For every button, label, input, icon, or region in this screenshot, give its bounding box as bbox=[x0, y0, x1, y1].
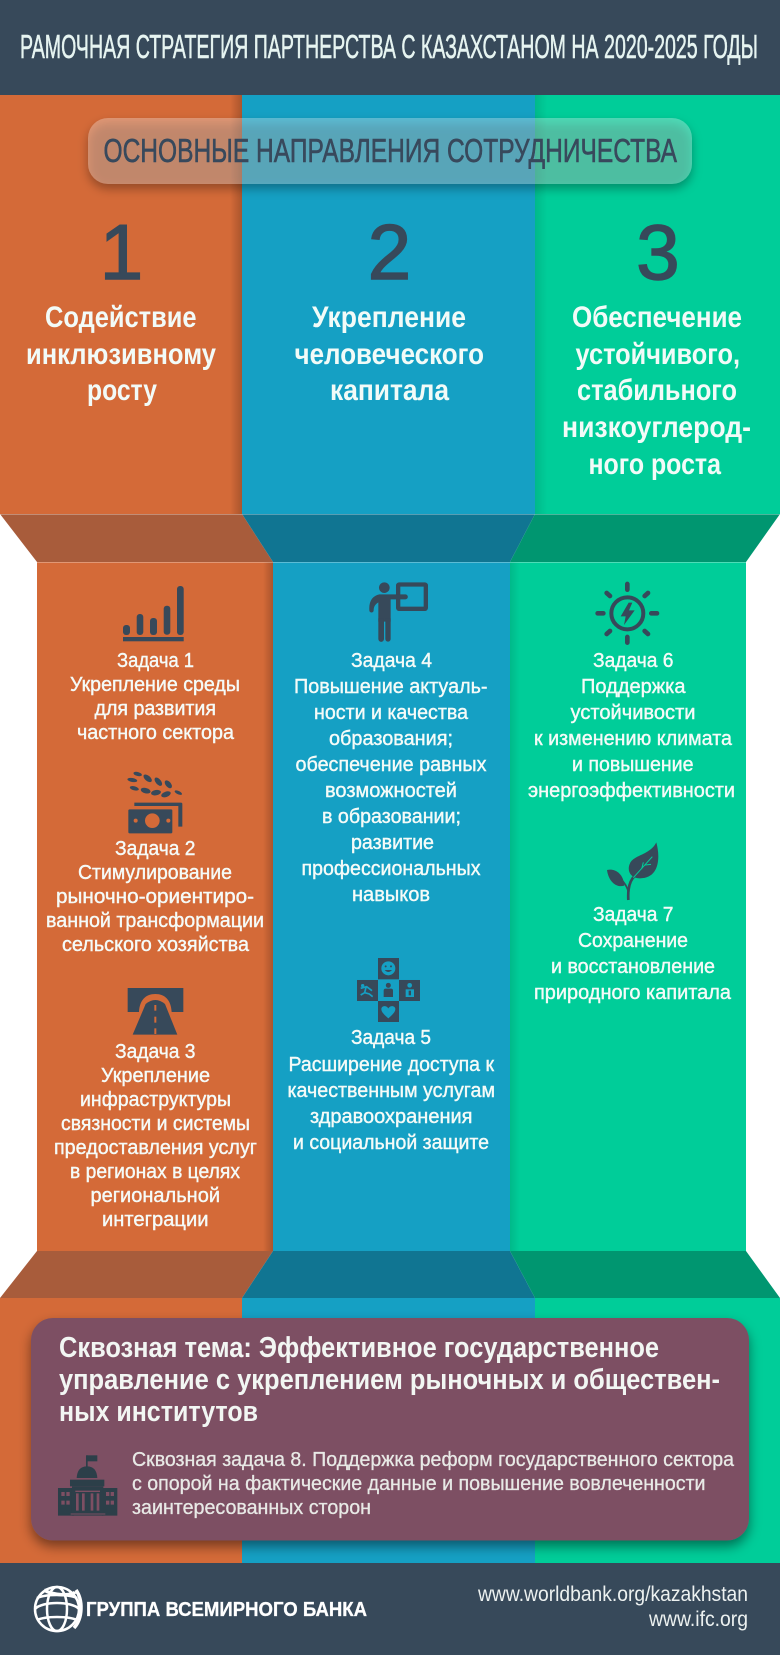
task 3 text: интеграции bbox=[102, 1208, 208, 1231]
World Bank Group wordmark: ГРУППА ВСЕМИРНОГО БАНКА bbox=[86, 1599, 367, 1621]
direction 3 heading bbox=[562, 301, 751, 481]
panel: task columns bbox=[37, 562, 746, 1251]
direction 1 heading: инклюзивному bbox=[26, 338, 217, 371]
direction 2 heading bbox=[294, 301, 484, 407]
task 6 text: Задача 6 bbox=[593, 649, 674, 672]
number 2: 2 bbox=[368, 208, 411, 296]
task 1 text: Укрепление среды bbox=[70, 673, 240, 696]
task 5 text: и социальной защите bbox=[293, 1131, 489, 1154]
panel: top direction columns bbox=[0, 95, 780, 514]
task 7 text: Задача 7 bbox=[593, 903, 674, 926]
task 5 text bbox=[288, 1026, 495, 1154]
task 6 text: и повышение bbox=[572, 753, 694, 776]
icon: bar chart bbox=[123, 586, 184, 641]
cross-cutting task text: с опорой на фактические данные и повышение вовлеченности bbox=[132, 1473, 706, 1495]
task 2 text: Стимулирование bbox=[78, 861, 232, 884]
task 3 text: в регионах в целях bbox=[70, 1160, 241, 1183]
task 7 text: природного капитала bbox=[534, 981, 732, 1004]
icon: wheat and money bbox=[127, 771, 183, 833]
task 2 text: Задача 2 bbox=[115, 837, 196, 860]
task 4 text: развитие bbox=[351, 831, 434, 854]
direction 3 heading: Обеспечение bbox=[572, 301, 742, 334]
connector trapezoids top bbox=[0, 514, 780, 562]
connector trapezoids bottom bbox=[0, 1251, 780, 1298]
task 5 text: Расширение доступа к bbox=[288, 1053, 495, 1076]
task 4 text: ности и качества bbox=[314, 701, 469, 724]
icon: road tunnel bbox=[128, 988, 183, 1035]
task 7 text bbox=[534, 903, 732, 1004]
icon: social services cross bbox=[357, 958, 420, 1022]
cross-cutting heading: ных институтов bbox=[59, 1396, 258, 1428]
direction 2 heading: капитала bbox=[330, 374, 450, 407]
panel: cross-cutting theme bbox=[31, 1318, 749, 1540]
task 4 text: в образовании; bbox=[322, 805, 461, 828]
task 5 text: здравоохранения bbox=[310, 1105, 472, 1128]
cross-cutting heading: Сквозная тема: Эффективное государственное bbox=[59, 1332, 659, 1364]
task 7 text: Сохранение bbox=[578, 929, 688, 952]
cross-cutting heading bbox=[59, 1332, 720, 1428]
task 4 text: профессиональных bbox=[302, 857, 481, 880]
icon: teacher at board bbox=[369, 582, 426, 642]
footer band bbox=[0, 1563, 780, 1655]
task 4 text: Повышение актуаль- bbox=[294, 675, 488, 698]
task 5 text: Задача 5 bbox=[351, 1026, 431, 1049]
task 5 text: качественным услугам bbox=[288, 1079, 495, 1102]
website links: www.worldbank.org/kazakhstan bbox=[477, 1582, 748, 1606]
task 3 text: региональной bbox=[90, 1184, 220, 1207]
task 3 text: связности и системы bbox=[61, 1112, 250, 1135]
task 2 text: ванной трансформации bbox=[46, 909, 264, 932]
direction 2 heading: человеческого bbox=[294, 338, 484, 371]
task 4 text: Задача 4 bbox=[351, 649, 432, 672]
direction 2 heading: Укрепление bbox=[312, 301, 466, 334]
task 1 text: для развития bbox=[94, 697, 216, 720]
task 6 text: устойчивости bbox=[570, 701, 696, 724]
task 4 text bbox=[294, 649, 488, 906]
task 1 text: Задача 1 bbox=[117, 649, 194, 672]
direction 1 heading: Содействие bbox=[45, 301, 196, 334]
task 6 text: к изменению климата bbox=[534, 727, 733, 750]
task 3 text: Задача 3 bbox=[115, 1040, 196, 1063]
heading pill: main directions bbox=[88, 118, 692, 184]
task 1 text bbox=[70, 649, 240, 744]
direction 3 heading: ного роста bbox=[588, 448, 721, 481]
task 2 text: сельского хозяйства bbox=[62, 933, 250, 956]
direction 3 heading: низкоуглерод- bbox=[562, 411, 751, 444]
website links: www.ifc.org bbox=[648, 1607, 748, 1631]
header band bbox=[0, 0, 780, 95]
task 7 text: и восстановление bbox=[551, 955, 715, 978]
task 4 text: навыков bbox=[352, 883, 430, 906]
task 2 text bbox=[46, 837, 264, 956]
icon: sun with energy bolt bbox=[598, 584, 657, 643]
task 6 text: энергоэффективности bbox=[528, 779, 735, 802]
panel: bottom column strip bbox=[0, 1298, 780, 1563]
icon: leaf sprout bbox=[607, 842, 658, 900]
task 4 text: возможностей bbox=[325, 779, 457, 802]
task 6 text: Поддержка bbox=[581, 675, 686, 698]
icon: government building bbox=[58, 1455, 117, 1516]
task 3 text bbox=[54, 1040, 257, 1231]
task 3 text: Укрепление bbox=[101, 1064, 210, 1087]
direction 1 heading: росту bbox=[87, 374, 157, 407]
cross-cutting task text bbox=[132, 1449, 735, 1519]
direction 3 heading: устойчивого, bbox=[576, 338, 740, 371]
task 6 text bbox=[528, 649, 735, 802]
number 1: 1 bbox=[100, 208, 143, 296]
task 1 text: частного сектора bbox=[77, 721, 235, 744]
task 3 text: инфраструктуры bbox=[80, 1088, 231, 1111]
task 4 text: образования; bbox=[329, 727, 453, 750]
number 3: 3 bbox=[636, 208, 680, 296]
website links bbox=[477, 1582, 748, 1631]
direction 1 heading bbox=[26, 301, 217, 407]
cross-cutting task text: заинтересованных сторон bbox=[132, 1497, 371, 1519]
cross-cutting task text: Сквозная задача 8. Поддержка реформ государственного сектора bbox=[132, 1449, 735, 1471]
icon: globe logo bbox=[35, 1587, 81, 1631]
task 2 text: рыночно-ориентиро- bbox=[56, 885, 254, 908]
task 4 text: обеспечение равных bbox=[296, 753, 487, 776]
task 3 text: предоставления услуг bbox=[54, 1136, 257, 1159]
direction 3 heading: стабильного bbox=[577, 374, 737, 407]
